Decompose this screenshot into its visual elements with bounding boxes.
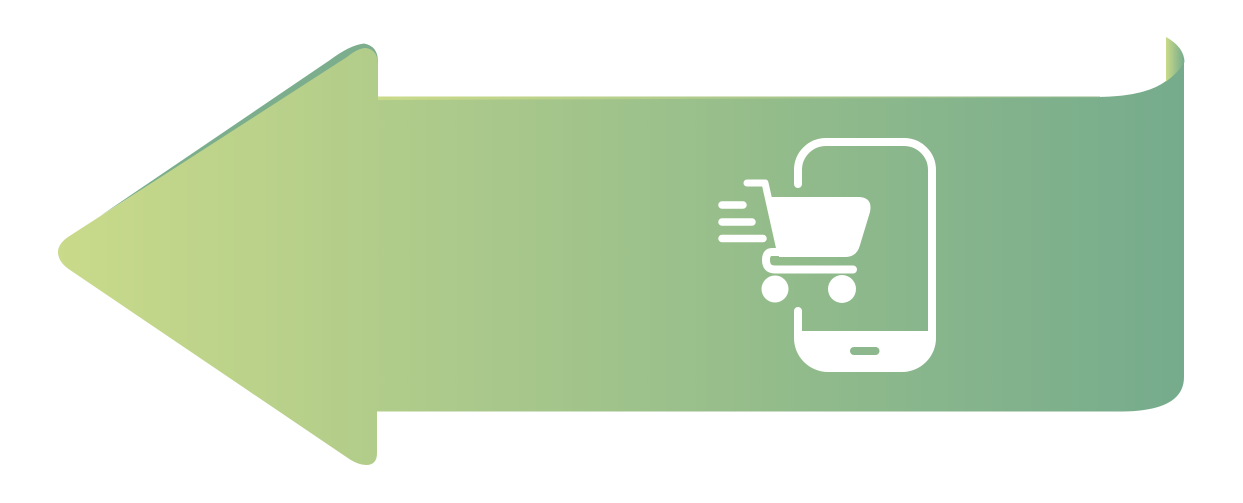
phone outline [798, 142, 932, 335]
cart tray [766, 252, 853, 270]
cart basket [768, 197, 870, 257]
arrow: curled top-right fold [1166, 37, 1184, 82]
cart wheels [762, 276, 788, 302]
arrow: fold shadow on upper arrowhead edge [100, 44, 378, 216]
phone base [794, 331, 936, 372]
cart handle [747, 183, 780, 250]
speed lines [722, 205, 763, 238]
phone home button [850, 347, 880, 355]
arrow: main body [58, 48, 1184, 465]
icon: phone with shopping cart [722, 142, 936, 372]
arrow: top highlight line [378, 96, 1100, 100]
